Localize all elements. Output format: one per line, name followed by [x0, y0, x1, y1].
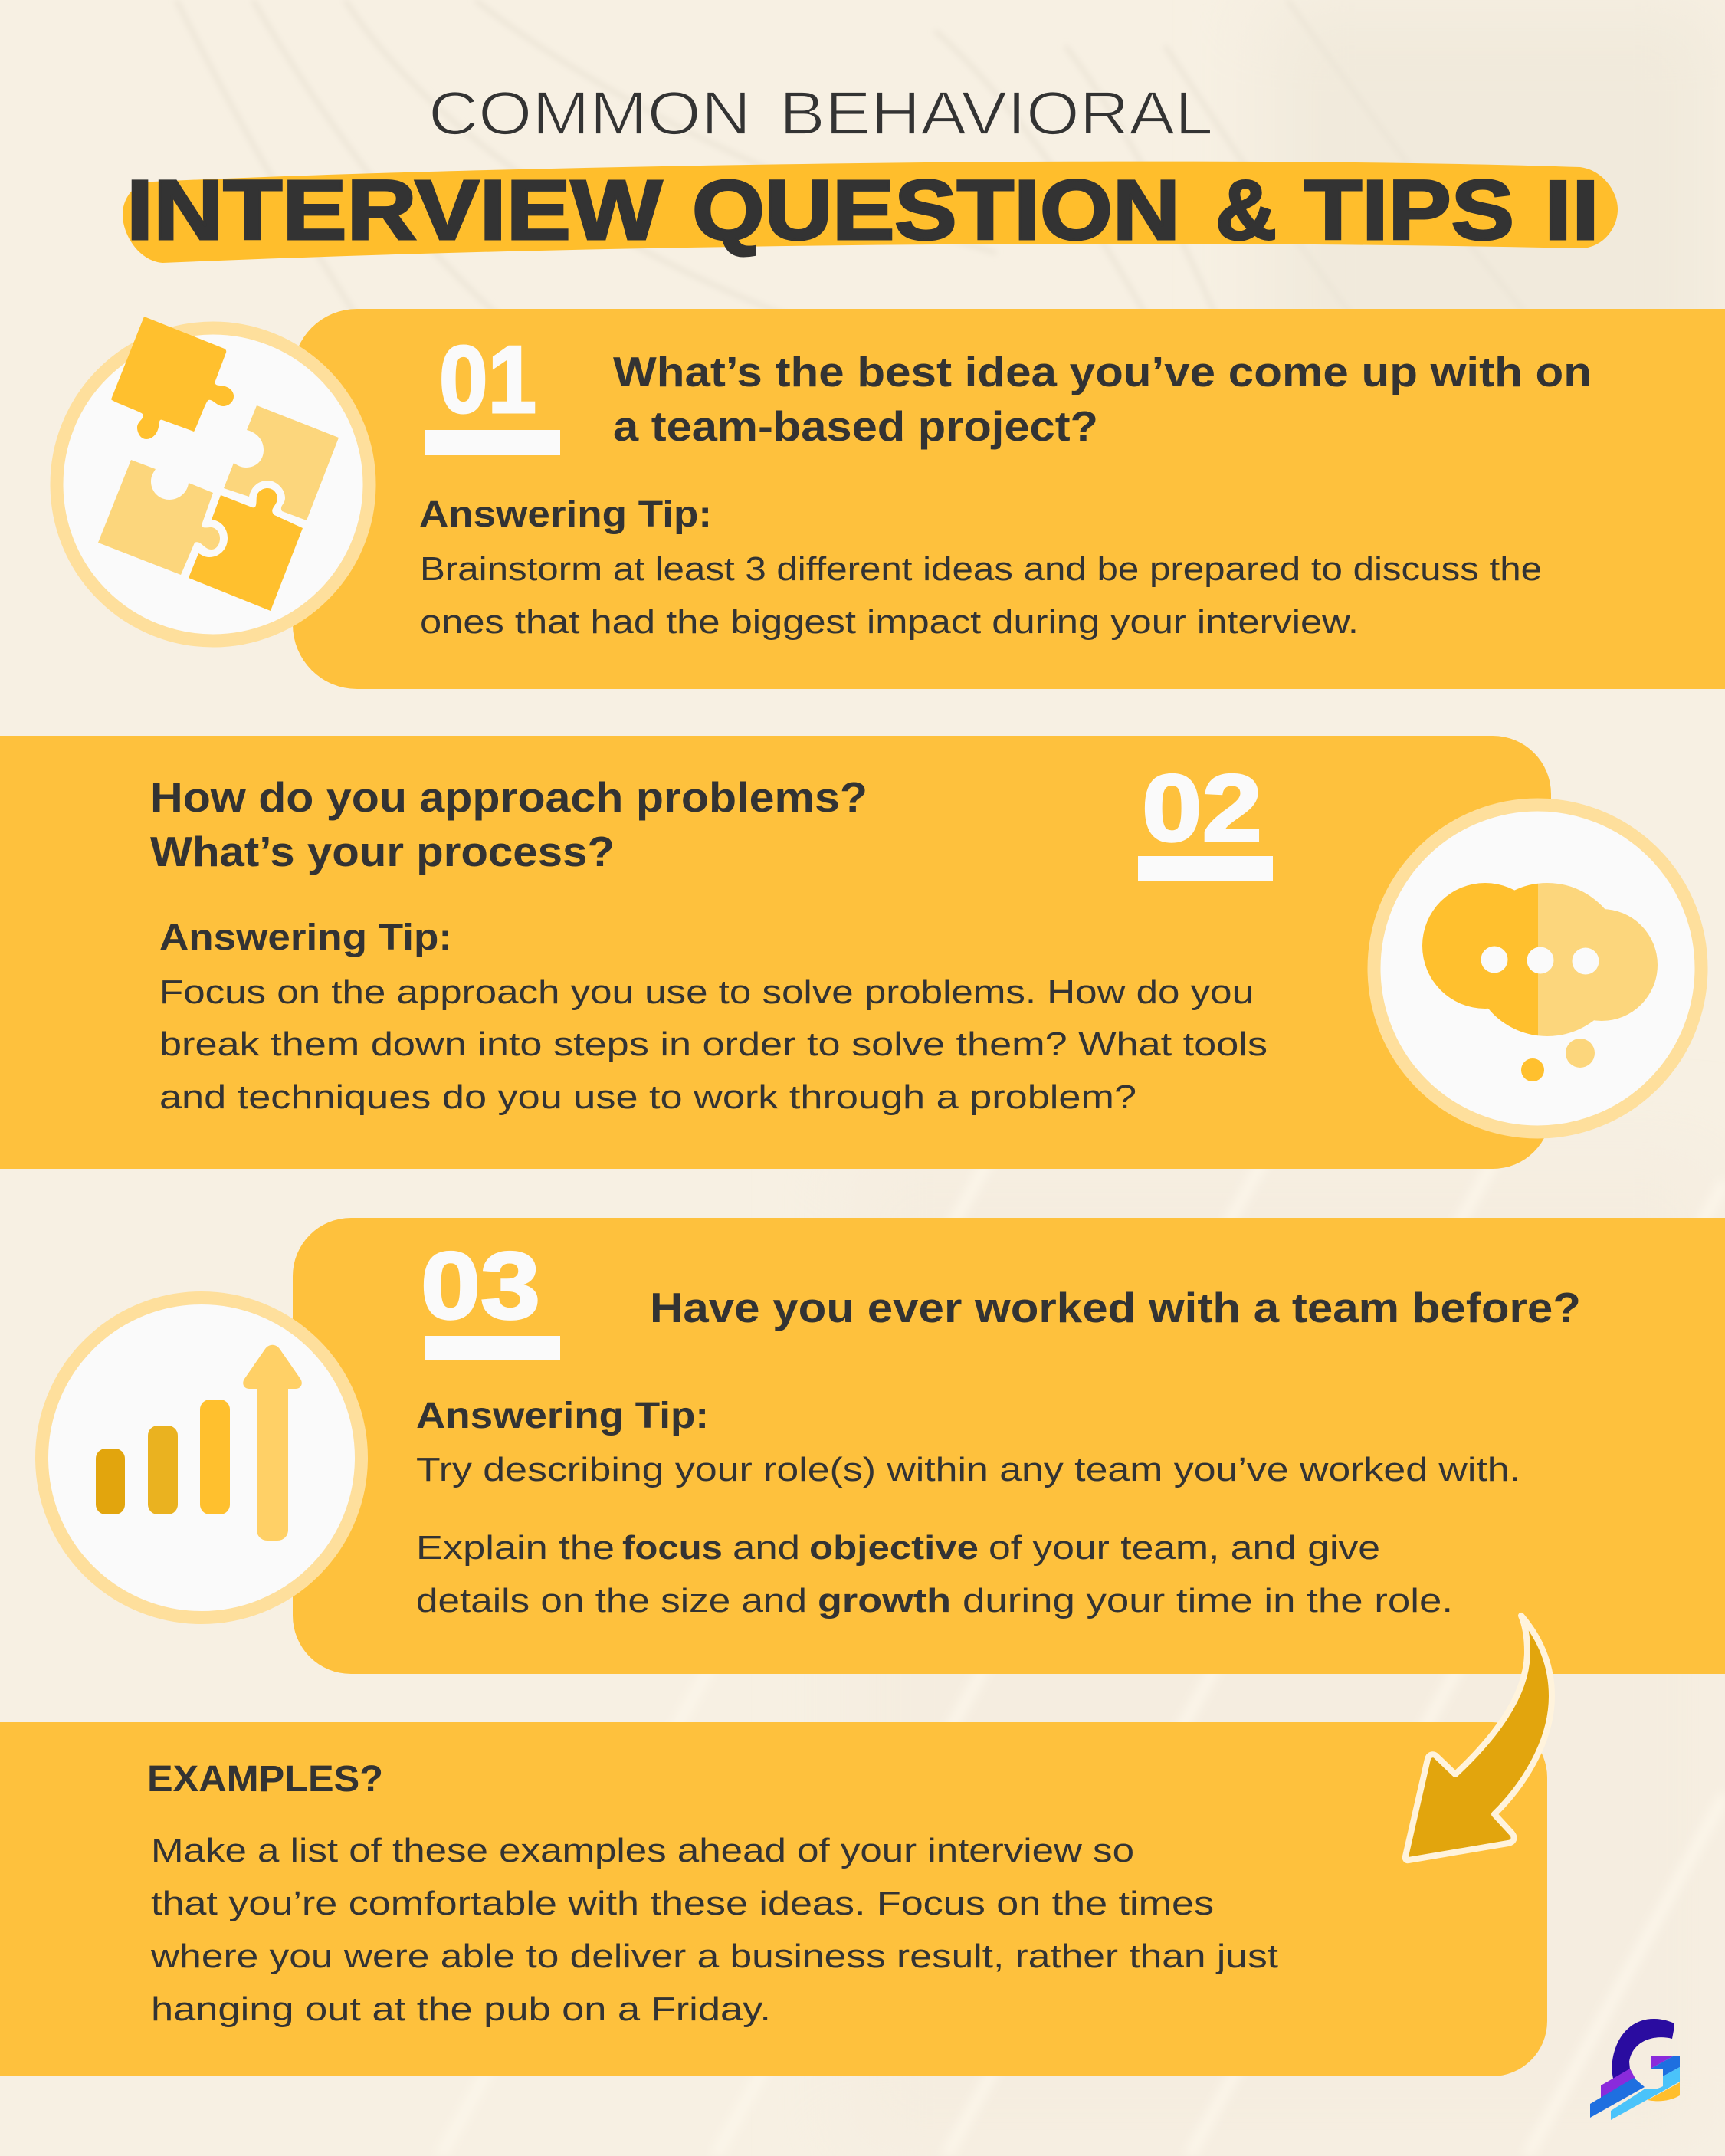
examples body text: that you’re comfortable with these ideas. Focus on the times	[151, 1885, 1214, 1922]
question 1 heading: a team-based project?	[613, 402, 1098, 450]
question 2 heading: What’s your process?	[150, 828, 615, 875]
examples body text	[150, 1832, 1278, 2028]
panel 3 background	[293, 1218, 1725, 1674]
answering tip 1	[419, 494, 1542, 641]
answering tip 3: growth	[818, 1582, 951, 1619]
question 3 heading: Have you ever worked with a team before?	[650, 1284, 1581, 1331]
number 03: 03	[421, 1233, 540, 1339]
icon: thought cloud	[1374, 805, 1701, 1132]
panel: question 2	[0, 736, 1551, 1169]
answering tip 3: of your team, and give	[989, 1529, 1380, 1567]
examples heading: EXAMPLES?	[147, 1759, 383, 1800]
answering tip 2: and techniques do you use to work through a problem?	[159, 1078, 1136, 1116]
title line 1	[428, 79, 1213, 147]
title line 2: QUESTION	[692, 163, 1180, 258]
panel: examples	[0, 1722, 1547, 2076]
answering tip 2	[159, 917, 1268, 1116]
number 03	[421, 1233, 560, 1360]
panel: question 3	[293, 1218, 1725, 1674]
question 1 heading: What’s the best idea you’ve come up with on	[613, 348, 1592, 395]
answering tip 1: Brainstorm at least 3 different ideas and be prepared to discuss the	[420, 550, 1542, 588]
title line 2: INTERVIEW	[126, 163, 662, 258]
answering tip 3: Explain the	[416, 1529, 615, 1567]
answering tip 2: break them down into steps in order to solve them? What tools	[159, 1025, 1268, 1063]
answering tip 3: focus	[622, 1529, 723, 1567]
title line 2: II	[1544, 163, 1599, 258]
answering tip 3: and	[733, 1529, 800, 1567]
number 02: 02	[1142, 756, 1262, 861]
title line 2: &	[1215, 163, 1277, 258]
icon: growth chart	[41, 1298, 362, 1617]
title line 1: COMMON	[428, 79, 751, 147]
title line 2	[126, 163, 1599, 258]
examples body text: hanging out at the pub on a Friday.	[151, 1990, 771, 2028]
answering tip 3: Try describing your role(s) within any team you’ve worked with.	[416, 1451, 1520, 1488]
title highlight brush	[123, 162, 1618, 263]
examples body text: Make a list of these examples ahead of your interview so	[151, 1832, 1134, 1869]
answering tip 3: details on the size and	[416, 1582, 807, 1619]
number 02	[1138, 756, 1273, 881]
icon: puzzle	[57, 317, 369, 641]
answering tip 3: objective	[809, 1529, 979, 1567]
answering tip 3: during your time in the role.	[963, 1582, 1453, 1619]
title line 1: BEHAVIORAL	[779, 79, 1213, 147]
examples body text: where you were able to deliver a business result, rather than just	[150, 1938, 1278, 1975]
panel: question 1	[293, 309, 1725, 689]
question 2 heading	[150, 773, 867, 875]
number 01	[425, 327, 560, 455]
answering tip 1: ones that had the biggest impact during your interview.	[420, 603, 1359, 641]
question 1 heading	[613, 348, 1592, 450]
number 01: 01	[439, 327, 536, 433]
answering tip 1: Answering Tip:	[419, 494, 712, 535]
arrow: curved down-left	[1405, 1616, 1552, 1860]
panel 1 background	[293, 309, 1725, 689]
logo: G mark	[1590, 2019, 1680, 2120]
answering tip 2: Answering Tip:	[159, 917, 452, 958]
question 2 heading: How do you approach problems?	[150, 773, 867, 821]
title line 2: TIPS	[1304, 163, 1514, 258]
panel 4 background	[0, 1722, 1547, 2076]
answering tip 3: Answering Tip:	[416, 1396, 709, 1436]
answering tip 3	[416, 1396, 1520, 1619]
answering tip 2: Focus on the approach you use to solve problems. How do you	[159, 973, 1254, 1011]
panel 2 background	[0, 736, 1551, 1169]
